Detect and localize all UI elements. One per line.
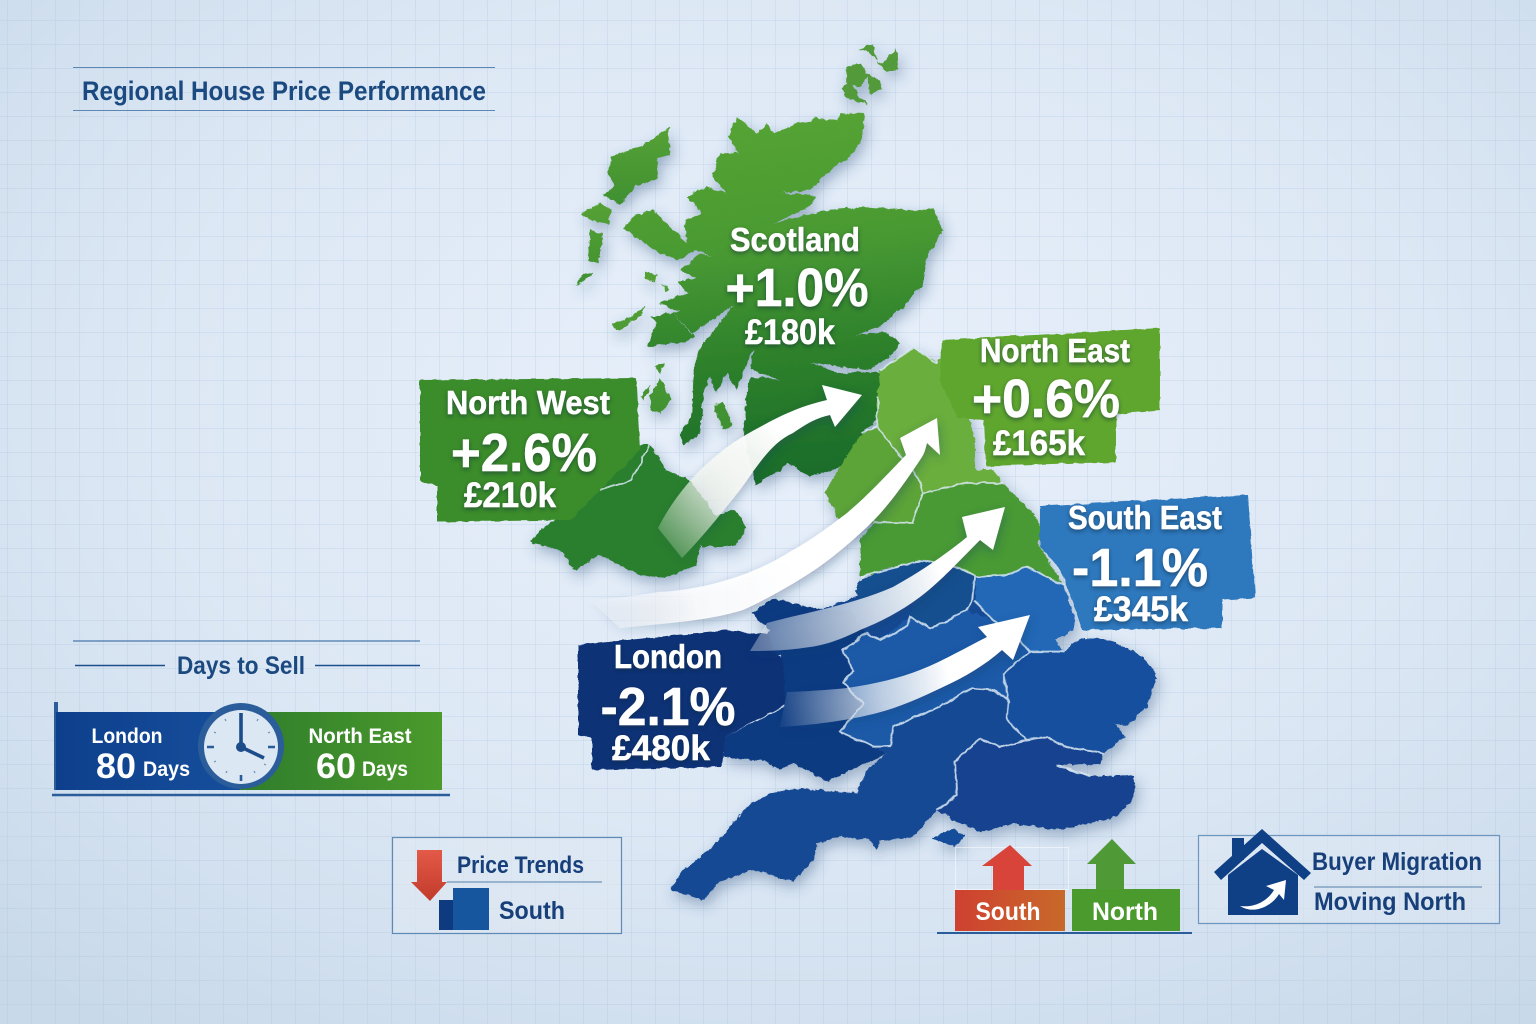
icon: blue blocks [439, 888, 489, 930]
region: South East [937, 737, 1135, 832]
card: North East: +0.6% [972, 369, 1120, 429]
label: buyer migration: Buyer Migration [1312, 848, 1482, 876]
region: East of England [1003, 638, 1157, 753]
bar: London: London [92, 725, 162, 748]
label: south: South [499, 897, 565, 925]
bar: North East: 60 [316, 747, 356, 786]
block: North [1072, 889, 1180, 931]
region borders [600, 348, 1103, 810]
card: London [578, 630, 785, 770]
block: South: South [976, 898, 1040, 926]
region: Yorkshire [860, 483, 1063, 585]
icon: red down arrow [411, 850, 447, 901]
region: West Midlands [840, 610, 1030, 747]
icon: house [1214, 829, 1311, 915]
icon: green up arrow [1087, 839, 1136, 889]
label: price trends: Price Trends [457, 852, 584, 879]
card: London: London [614, 638, 722, 675]
region: Wales [723, 598, 887, 782]
panel: south and north comparison [937, 839, 1192, 933]
heading: days to sell: Days to Sell [177, 652, 305, 680]
region: Scotland and islands [575, 43, 943, 485]
card: Scotland: +1.0% [726, 258, 868, 318]
card: Scotland: Scotland [730, 221, 860, 258]
region: North West England [825, 427, 923, 530]
card: London: £480k [612, 729, 711, 768]
bar: North East: Days [362, 758, 408, 781]
icon: clock [198, 703, 284, 789]
region: Midlands north [857, 560, 975, 628]
bar: London [54, 702, 246, 790]
region: East Midlands [975, 567, 1075, 652]
card: North West: +2.6% [451, 423, 597, 483]
island: Isle of Wight [932, 828, 965, 847]
card: North East: £165k [993, 424, 1086, 463]
card: London: -2.1% [600, 677, 736, 737]
outline: all southern regions [670, 560, 1157, 900]
panel: days to sell [52, 641, 450, 795]
card: North West [420, 378, 640, 522]
bar: North East: North East [308, 725, 412, 748]
card: Scotland [726, 221, 868, 352]
card: South East: South East [1068, 499, 1222, 536]
block: South [955, 890, 1065, 931]
island: Lewis and Harris [603, 128, 669, 205]
card: North East: North East [980, 332, 1130, 369]
bar: London: 80 [96, 747, 136, 786]
bar: London: Days [143, 758, 190, 781]
region: England south and Wales [670, 560, 1157, 900]
arrow: Northern Ireland to Scotland [658, 385, 862, 558]
mainland Scotland [623, 113, 943, 485]
island: Uists [575, 203, 612, 287]
title: Regional House Price Performance [82, 76, 486, 106]
panel: buyer migration [1198, 829, 1500, 924]
card: Scotland: £180k [745, 313, 835, 352]
label: moving north: Moving North [1314, 888, 1466, 916]
arrow: Wales to East Midlands [780, 615, 1030, 727]
card: South East [1040, 495, 1255, 630]
islands: Skye Mull Islay Arran [612, 272, 733, 430]
arrow: Wales to Yorkshire [750, 507, 1005, 651]
card: North West: £210k [464, 476, 557, 515]
bar: North East [240, 712, 442, 790]
map of the UK regions [530, 43, 1157, 900]
card: South East: £345k [1094, 590, 1189, 629]
card: North West: North West [446, 384, 610, 421]
panel: price trends [392, 838, 622, 934]
icon: red up arrow [982, 845, 1032, 890]
card: North East [940, 328, 1160, 466]
region: North East England [877, 345, 1003, 493]
arrow: London to North East [590, 418, 940, 628]
card: South East: -1.1% [1072, 538, 1208, 598]
island: Shetland and Orkney [842, 43, 898, 105]
region: Northern Ireland [530, 444, 747, 578]
block: North: North [1092, 898, 1158, 926]
